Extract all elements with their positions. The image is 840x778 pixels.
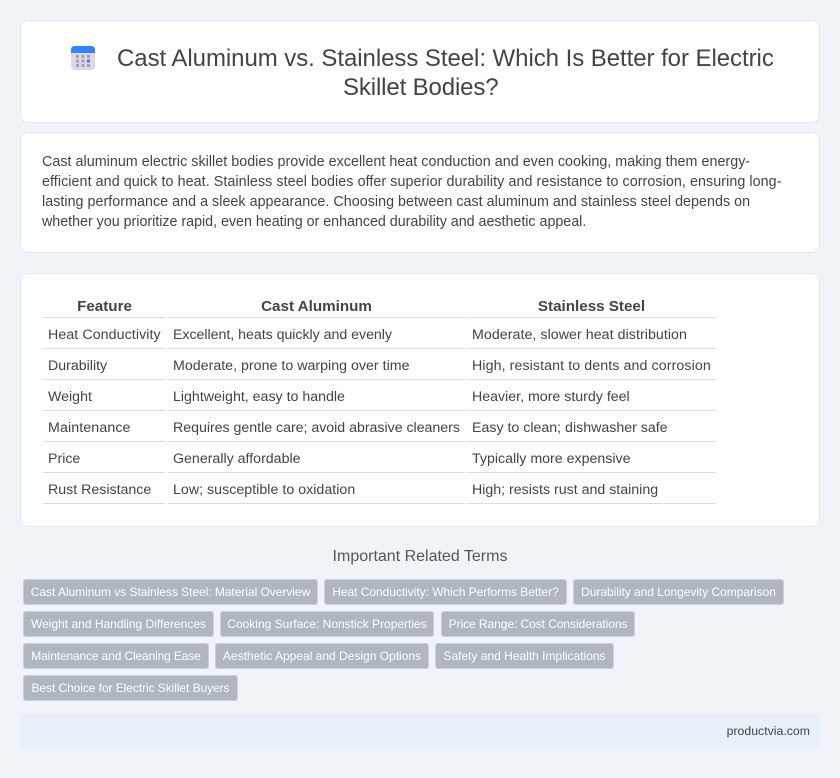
row: Rust Resistance <box>48 482 658 498</box>
comparison table <box>43 298 716 504</box>
row: Durability: Durability <box>48 358 107 374</box>
row: Maintenance: Easy to clean; dishwasher safe <box>472 420 668 436</box>
tag <box>215 643 429 669</box>
row: Durability: Moderate, prone to warping over time <box>173 358 410 374</box>
title: Cast Aluminum vs. Stainless Steel: Which Is Better for Electric <box>117 45 774 72</box>
row: Price: Generally affordable <box>173 451 301 467</box>
header: Stainless Steel: Stainless Steel <box>538 298 645 315</box>
row: Weight: Weight <box>48 389 92 405</box>
tag <box>23 611 214 637</box>
footer bar <box>20 714 820 748</box>
row: Rust Resistance: Rust Resistance <box>48 482 151 498</box>
panel: title card <box>20 20 820 123</box>
summary text: efficient and quick to heat. Stainless steel bodies offer superior durability and resistance to corrosion, ensuring long- <box>42 174 782 190</box>
row: Weight <box>48 389 630 405</box>
row: Durability <box>48 358 711 374</box>
row: Durability: High, resistant to dents and corrosion <box>472 358 711 374</box>
tag: Heat Conductivity: Which Performs Better? <box>332 585 559 599</box>
row: Heat Conductivity <box>48 327 687 343</box>
tag <box>23 643 209 669</box>
row: Rust Resistance: High; resists rust and staining <box>472 482 658 498</box>
tag <box>220 611 434 637</box>
header: Cast Aluminum: Cast Aluminum <box>261 298 372 315</box>
tag: Durability and Longevity Comparison <box>581 585 776 599</box>
row: Price: Price <box>48 451 80 467</box>
tag: Safety and Health Implications <box>443 649 606 663</box>
tag: Weight and Handling Differences <box>31 617 206 631</box>
row: Heat Conductivity: Moderate, slower heat distribution <box>472 327 687 343</box>
tag: Cast Aluminum vs Stainless Steel: Material Overview <box>31 585 310 599</box>
row: Weight: Lightweight, easy to handle <box>173 389 345 405</box>
summary text: lasting performance and a sleek appearance. Choosing between cast aluminum and stainless steel depends on <box>42 194 750 210</box>
row: Heat Conductivity: Excellent, heats quickly and evenly <box>173 327 392 343</box>
header: Feature: Feature <box>77 298 132 315</box>
row: Price <box>48 451 630 467</box>
icon: calendar <box>71 46 95 70</box>
tag: Cooking Surface: Nonstick Properties <box>227 617 427 631</box>
row: Price: Typically more expensive <box>472 451 630 467</box>
row: Maintenance: Maintenance <box>48 420 131 436</box>
heading: related terms: Important Related Terms <box>333 548 507 565</box>
row: Weight: Heavier, more sturdy feel <box>472 389 630 405</box>
row: Maintenance: Requires gentle care; avoid abrasive cleaners <box>173 420 460 436</box>
row: Maintenance <box>48 420 668 436</box>
tag <box>441 611 635 637</box>
title <box>117 45 774 101</box>
tag <box>23 675 238 701</box>
tag: Best Choice for Electric Skillet Buyers <box>31 681 230 695</box>
row: Rust Resistance: Low; susceptible to oxidation <box>173 482 355 498</box>
summary text <box>42 154 782 230</box>
panel: summary card <box>20 132 820 253</box>
tag: Price Range: Cost Considerations <box>449 617 627 631</box>
panel: comparison table card <box>20 273 820 527</box>
tag <box>573 579 784 605</box>
footer text: productvia.com <box>727 724 810 738</box>
title: Skillet Bodies? <box>343 74 498 101</box>
tag <box>324 579 567 605</box>
summary text: Cast aluminum electric skillet bodies provide excellent heat conduction and even cooking, making them energy- <box>42 154 750 170</box>
tag list <box>23 579 784 701</box>
summary text: whether you prioritize rapid, even heating or enhanced durability and aesthetic appeal. <box>42 214 586 230</box>
tag <box>23 579 318 605</box>
tag <box>435 643 614 669</box>
tag: Maintenance and Cleaning Ease <box>31 649 201 663</box>
row: Heat Conductivity: Heat Conductivity <box>48 327 161 343</box>
tag: Aesthetic Appeal and Design Options <box>223 649 421 663</box>
